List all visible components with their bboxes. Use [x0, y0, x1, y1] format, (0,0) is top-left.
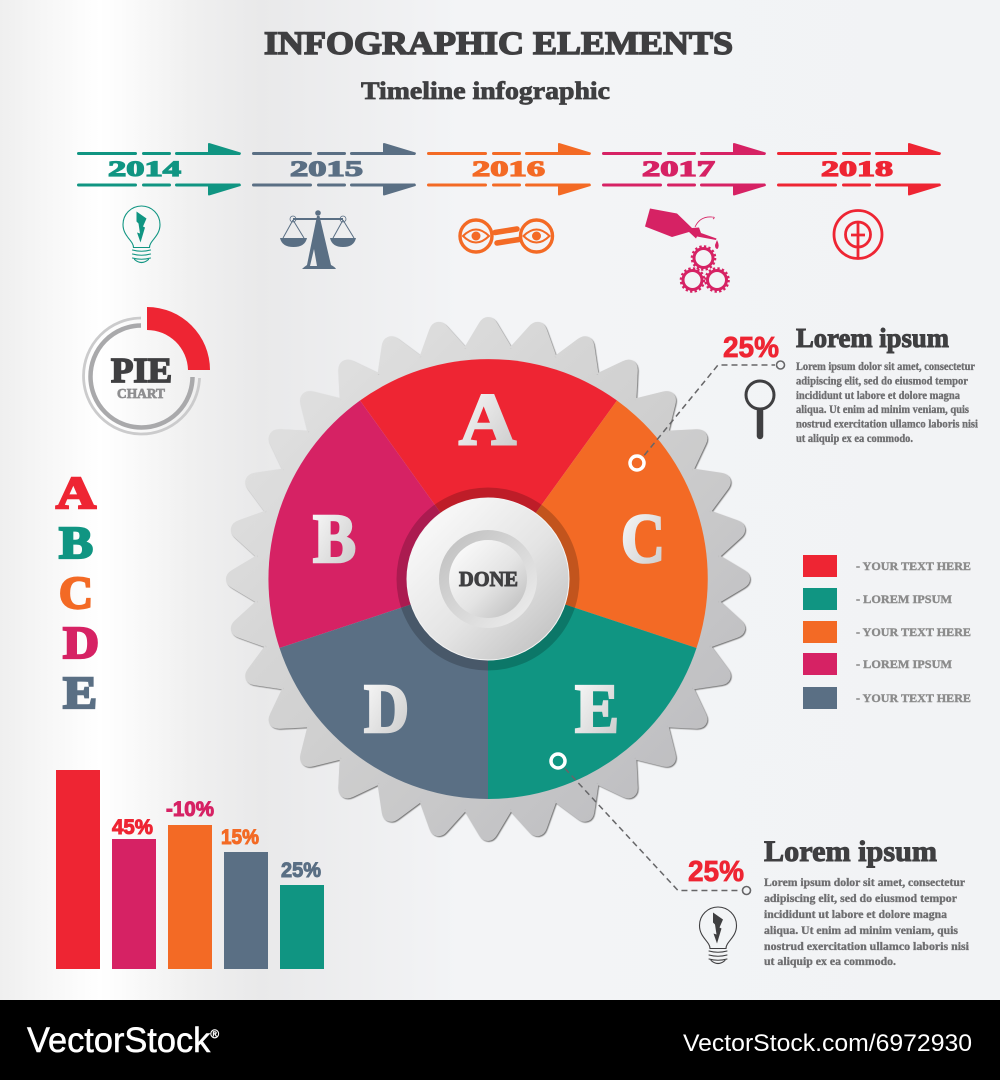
- letter key: D: [63, 617, 99, 668]
- timeline item 2014: [77, 143, 241, 196]
- timeline item 2016: [427, 143, 591, 196]
- body text: [764, 875, 970, 968]
- slice C: [488, 400, 708, 648]
- percent: 25%: [688, 856, 744, 888]
- timeline item 2017: 2017: [642, 156, 715, 181]
- legend row 4: - LOREM IPSUM: [856, 659, 952, 671]
- letter C: C: [621, 501, 665, 578]
- gear pie chart: [218, 309, 758, 849]
- icon: target with cross: [834, 210, 882, 258]
- marker on slice C: [630, 456, 644, 470]
- button label: DONE: [459, 567, 518, 591]
- letter key: B: [59, 517, 93, 568]
- body text: Lorem ipsum dolor sit amet, consectetur: [764, 875, 966, 889]
- body text: aliqua. Ut enim ad minim veniam, quis: [796, 404, 969, 416]
- legend row 2: [803, 588, 952, 610]
- icon: magnifier: [746, 381, 774, 436]
- body text: [796, 361, 979, 445]
- body text: adipiscing elit, sed do eiusmod tempor: [764, 891, 958, 905]
- marker on slice E: [551, 754, 565, 768]
- bar labels: 25%: [281, 859, 321, 882]
- legend row 1: [803, 555, 971, 577]
- timeline arrows and years: [77, 143, 941, 196]
- bars: [56, 770, 324, 969]
- timeline item 2017: [602, 143, 766, 196]
- timeline item 2018: [777, 143, 941, 196]
- letter key: E: [63, 667, 97, 718]
- brand logo text: ®: [210, 1027, 219, 1041]
- inner ring: [91, 326, 192, 427]
- dashed leader: [558, 761, 741, 890]
- pie chart badge: [84, 307, 210, 434]
- timeline item 2014: 2014: [108, 156, 181, 181]
- title: INFOGRAPHIC ELEMENTS: [264, 26, 733, 62]
- timeline item 2015: [252, 143, 416, 196]
- footer bar: [0, 1000, 1000, 1080]
- subtitle: Timeline infographic: [361, 78, 610, 105]
- legend row 5: - YOUR TEXT HERE: [856, 693, 971, 705]
- body text: incididunt ut labore et dolore magna: [796, 390, 960, 402]
- legend row 4: [803, 653, 952, 675]
- bar labels: [112, 798, 321, 882]
- legend row 3: [803, 621, 971, 643]
- timeline item 2015: 2015: [290, 156, 363, 181]
- outer ring: [84, 318, 200, 434]
- legend row 2: - LOREM IPSUM: [856, 594, 952, 606]
- icon: light bulb teal: [123, 206, 160, 262]
- bar labels: 15%: [221, 826, 259, 849]
- body text: Lorem ipsum dolor sit amet, consectetur: [796, 361, 975, 373]
- slice D: [280, 579, 488, 799]
- leader end: [742, 886, 750, 894]
- bar chart: [56, 770, 324, 969]
- heading: Lorem ipsum: [764, 835, 937, 868]
- body text: ut aliquip ex ea commodo.: [764, 954, 896, 968]
- heading: Lorem ipsum: [796, 323, 949, 353]
- icon: light bulb outline: [700, 907, 736, 964]
- legend row 1: - YOUR TEXT HERE: [856, 561, 971, 573]
- bar labels: -10%: [166, 798, 214, 821]
- centre button: [396, 488, 580, 670]
- callout: bottom right: [551, 754, 970, 968]
- legend row 3: - YOUR TEXT HERE: [856, 627, 971, 639]
- dashed leader: [638, 365, 775, 463]
- letter E: E: [575, 671, 619, 748]
- legend row 5: [803, 687, 971, 709]
- label PIE: PIE: [111, 351, 172, 390]
- slice E: [488, 579, 696, 799]
- icon: oil bottle and gears: [645, 208, 728, 292]
- body text: incididunt ut labore et dolore magna: [764, 907, 947, 921]
- icon: two linked eyes: [460, 220, 552, 252]
- timeline item 2016: 2016: [472, 156, 545, 181]
- body text: adipiscing elit, sed do eiusmod tempor: [796, 376, 968, 388]
- bar labels: 45%: [112, 816, 153, 839]
- letter key: A: [56, 467, 96, 518]
- label CHART: CHART: [117, 386, 165, 401]
- body text: nostrud exercitation ullamco laboris nisi: [796, 418, 979, 430]
- letter key: [56, 467, 99, 718]
- legend: [803, 555, 971, 709]
- body text: ut aliquip ex ea commodo.: [796, 433, 913, 445]
- slice A: [360, 359, 617, 579]
- letter D: D: [364, 671, 409, 748]
- icon: scales: [280, 210, 356, 269]
- leader end: [776, 361, 784, 369]
- timeline item 2018: 2018: [821, 156, 893, 181]
- body text: nostrud exercitation ullamco laboris nisi: [764, 939, 970, 953]
- body text: aliqua. Ut enim ad minim veniam, quis: [764, 923, 958, 937]
- letter A: A: [459, 379, 516, 461]
- letter key: C: [59, 567, 93, 618]
- red wedge: [147, 307, 210, 370]
- image id: VectorStock.com/6972930: [683, 1030, 972, 1057]
- brand logo text: VectorStock: [27, 1021, 214, 1060]
- slice B: [268, 400, 488, 648]
- gear: [218, 309, 758, 849]
- callout: top right: [630, 323, 979, 470]
- letter B: B: [313, 501, 356, 578]
- percent: 25%: [723, 332, 779, 364]
